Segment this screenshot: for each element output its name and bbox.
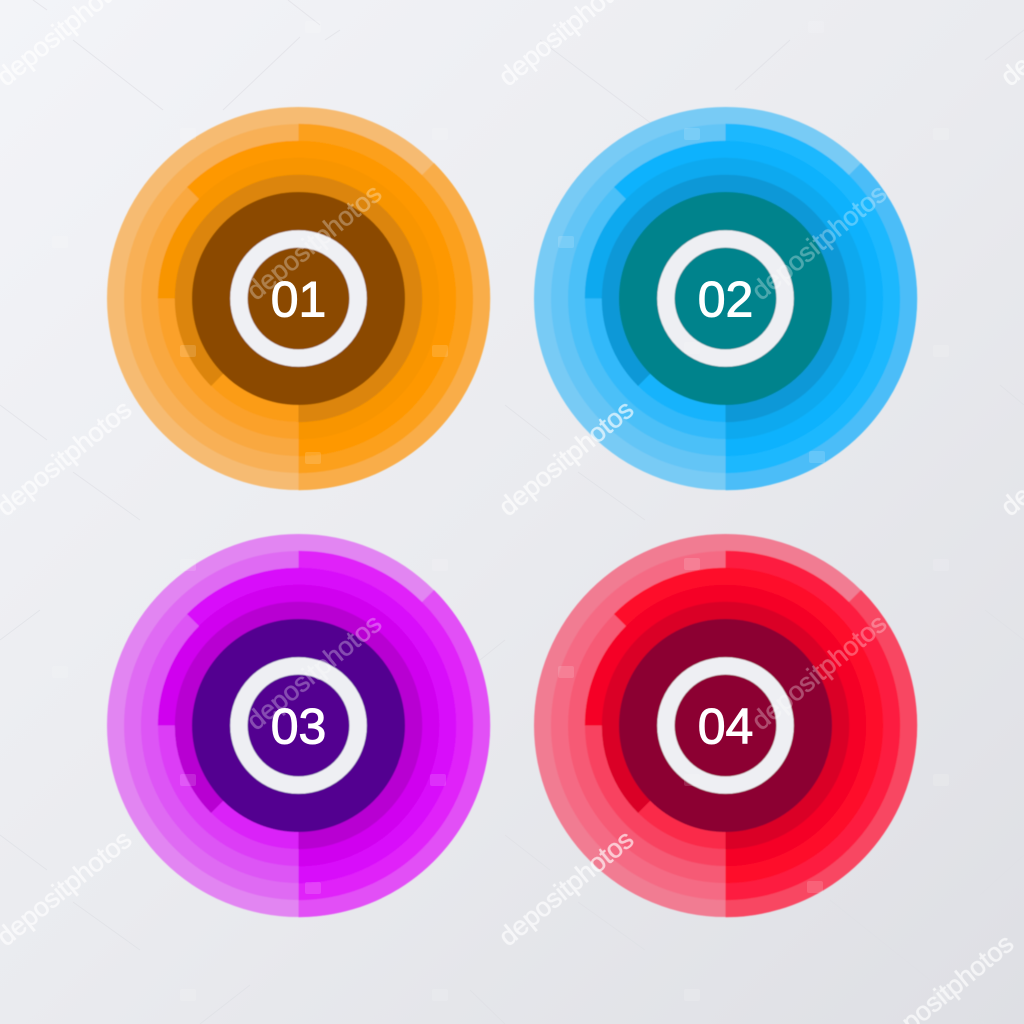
- badge 01: orange: [107, 107, 490, 490]
- centre disc: [192, 192, 405, 405]
- white ring: [239, 666, 358, 785]
- centre disc: [192, 619, 405, 832]
- number 04: 04: [698, 698, 753, 754]
- number 03: 03: [271, 698, 326, 754]
- spiral arcs, darker tones: [166, 560, 481, 908]
- watermark text over the badges: [241, 178, 892, 736]
- concentric rings, lighter tones: [534, 107, 917, 490]
- white ring: [666, 239, 785, 358]
- watermark text over the background: depositphotos: [493, 824, 639, 952]
- watermark text over the badges: depositphotos: [746, 608, 892, 736]
- number 01: 01: [271, 272, 326, 328]
- badge 03: purple: [107, 534, 490, 917]
- badge 02: blue: [534, 107, 917, 490]
- centre disc: [619, 192, 832, 405]
- concentric rings, lighter tones: [107, 107, 490, 490]
- white ring: [239, 239, 358, 358]
- badge 04: red: [534, 534, 917, 917]
- spiral arcs, darker tones: [166, 132, 481, 482]
- spiral arcs, darker tones: [594, 132, 908, 482]
- watermark text over the badges: depositphotos: [241, 608, 387, 736]
- white ring: [666, 666, 785, 785]
- watermark text over the background: depositphotos: [493, 394, 639, 522]
- concentric rings, lighter tones: [534, 534, 917, 917]
- centre disc: [619, 619, 832, 832]
- spiral arcs, darker tones: [594, 560, 908, 908]
- watermark text over the badges: depositphotos: [746, 178, 892, 306]
- concentric rings, lighter tones: [107, 534, 490, 917]
- watermark text over the badges: depositphotos: [241, 178, 387, 306]
- number 02: 02: [698, 272, 753, 328]
